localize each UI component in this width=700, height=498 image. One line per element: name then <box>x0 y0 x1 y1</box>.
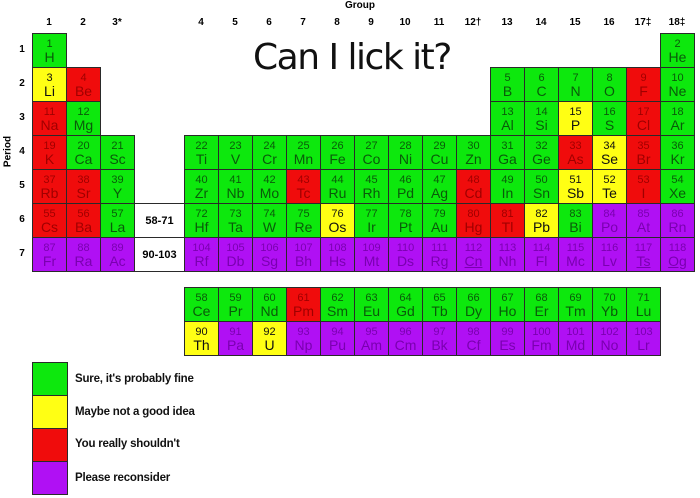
panel: main periodic table: Db <box>227 253 244 269</box>
period numbers: 4 <box>19 146 25 157</box>
panel: main periodic table: Rf <box>194 253 208 269</box>
panel: main periodic table: Se <box>601 151 618 167</box>
period numbers: 7 <box>19 248 25 259</box>
group axis label: Group <box>345 0 375 11</box>
panel: lanthanides and actinides: Sm <box>327 303 348 319</box>
panel: main periodic table: Br <box>636 151 650 167</box>
panel: main periodic table: 55 <box>43 208 56 220</box>
panel: main periodic table: 20 <box>77 140 90 152</box>
panel: main periodic table: 8 <box>606 72 613 84</box>
panel: main periodic table: Bh <box>295 253 312 269</box>
panel: main periodic table: 32 <box>535 140 548 152</box>
panel: main periodic table: 110 <box>397 242 414 254</box>
panel: main periodic table: 26 <box>331 140 344 152</box>
panel: main periodic table: Cs <box>41 219 58 235</box>
panel: lanthanides and actinides: Pr <box>228 303 242 319</box>
group numbers: 8 <box>334 17 340 28</box>
panel: main periodic table: Tl <box>502 219 513 235</box>
panel: main periodic table: B <box>503 83 512 99</box>
panel: lanthanides and actinides <box>184 287 661 356</box>
panel: main periodic table: Cr <box>262 151 277 167</box>
panel: lanthanides and actinides: 93 <box>297 326 310 338</box>
panel: lanthanides and actinides: No <box>601 337 618 353</box>
panel: main periodic table: Xe <box>669 185 686 201</box>
panel: lanthanides and actinides: Er <box>534 303 548 319</box>
panel: lanthanides and actinides: 103 <box>634 326 653 338</box>
panel: main periodic table: Ba <box>75 219 92 235</box>
panel: main periodic table: Li <box>44 83 55 99</box>
panel: main periodic table: Ni <box>399 151 412 167</box>
panel: main periodic table: Ds <box>397 253 414 269</box>
panel: main periodic table: 13 <box>501 106 514 118</box>
panel: lanthanides and actinides: Pa <box>227 337 244 353</box>
panel: main periodic table: 17 <box>637 106 650 118</box>
panel: main periodic table: 112 <box>465 242 482 254</box>
panel: main periodic table: 34 <box>603 140 616 152</box>
panel: lanthanides and actinides: U <box>264 337 275 353</box>
panel: main periodic table: Ra <box>75 253 92 269</box>
panel: main periodic table: Mt <box>364 253 379 269</box>
panel: main periodic table: W <box>263 219 276 235</box>
panel: main periodic table: 4 <box>80 72 87 84</box>
panel: main periodic table: S <box>605 117 614 133</box>
panel: lanthanides and actinides: Eu <box>363 303 380 319</box>
panel: main periodic table: 50 <box>535 174 548 186</box>
panel: lanthanides and actinides: 71 <box>637 292 650 304</box>
panel: main periodic table: 114 <box>533 242 550 254</box>
panel: lanthanides and actinides: 68 <box>535 292 548 304</box>
panel: main periodic table: Y <box>113 185 122 201</box>
panel: main periodic table: Lv <box>602 253 617 269</box>
panel: lanthanides and actinides: 67 <box>501 292 514 304</box>
panel: main periodic table: Tc <box>296 185 310 201</box>
panel: main periodic table: Bi <box>569 219 582 235</box>
legend: Sure, it's probably fine <box>75 373 194 385</box>
panel: main periodic table: 74 <box>263 208 276 220</box>
panel: main periodic table: 106 <box>260 242 279 254</box>
group numbers: 11 <box>434 17 444 28</box>
panel: main periodic table: 44 <box>331 174 344 186</box>
panel: lanthanides and actinides: Bk <box>431 337 448 353</box>
panel: lanthanides and actinides: 60 <box>263 292 276 304</box>
panel: main periodic table: 40 <box>195 174 208 186</box>
panel: main periodic table: Ge <box>532 151 551 167</box>
period numbers: 1 <box>19 44 25 55</box>
panel: lanthanides and actinides: 61 <box>297 292 310 304</box>
panel: main periodic table: Ar <box>670 117 684 133</box>
panel: main periodic table: Pd <box>397 185 414 201</box>
panel: lanthanides and actinides: Ho <box>499 303 516 319</box>
panel: main periodic table: Pt <box>399 219 412 235</box>
panel: lanthanides and actinides: Cf <box>466 337 480 353</box>
group numbers: 5 <box>232 17 238 28</box>
panel: lanthanides and actinides: Cm <box>395 337 416 353</box>
panel: main periodic table: Ga <box>498 151 517 167</box>
group numbers: 10 <box>399 17 411 28</box>
panel: main periodic table: 30 <box>467 140 480 152</box>
group numbers <box>46 17 685 28</box>
panel: main periodic table: O <box>604 83 615 99</box>
panel: main periodic table: Sn <box>533 185 550 201</box>
panel: main periodic table: 49 <box>501 174 514 186</box>
panel: lanthanides and actinides: Dy <box>465 303 482 319</box>
panel: main periodic table: Ts <box>636 253 650 269</box>
panel: lanthanides and actinides: Lr <box>637 337 650 353</box>
panel: main periodic table: 104 <box>192 242 211 254</box>
period numbers: 6 <box>19 214 25 225</box>
panel: main periodic table: 86 <box>671 208 684 220</box>
panel: main periodic table: At <box>637 219 650 235</box>
group numbers: 13 <box>501 17 513 28</box>
panel: main periodic table: Cl <box>637 117 650 133</box>
panel: lanthanides and actinides: 64 <box>399 292 412 304</box>
panel: lanthanides and actinides: 100 <box>532 326 551 338</box>
panel: main periodic table: 115 <box>567 242 584 254</box>
group numbers: 15 <box>569 17 581 28</box>
panel: main periodic table: Ne <box>669 83 686 99</box>
panel: main periodic table: 108 <box>328 242 347 254</box>
panel: main periodic table: He <box>669 49 686 65</box>
panel: main periodic table: Be <box>75 83 92 99</box>
panel: main periodic table: 22 <box>195 140 208 152</box>
panel: main periodic table: 12 <box>77 106 90 118</box>
panel: lanthanides and actinides: Ce <box>193 303 210 319</box>
panel: main periodic table: 27 <box>365 140 378 152</box>
group numbers: 9 <box>368 17 374 28</box>
panel: main periodic table: 116 <box>601 242 618 254</box>
panel: lanthanides and actinides: 99 <box>501 326 514 338</box>
panel: main periodic table: 76 <box>331 208 344 220</box>
panel: main periodic table: 15 <box>569 106 582 118</box>
panel: main periodic table: Sg <box>261 253 278 269</box>
panel: main periodic table: Rn <box>669 219 686 235</box>
panel: main periodic table: 1 <box>46 38 53 50</box>
panel: main periodic table: 82 <box>535 208 548 220</box>
panel: lanthanides and actinides: Es <box>499 337 516 353</box>
panel: main periodic table: 83 <box>569 208 582 220</box>
panel: main periodic table: Og <box>668 253 687 269</box>
panel: main periodic table: Ru <box>329 185 346 201</box>
panel: main periodic table: Mg <box>74 117 93 133</box>
panel: main periodic table: Ta <box>228 219 243 235</box>
panel: main periodic table: Al <box>501 117 514 133</box>
group numbers: 3* <box>112 17 122 28</box>
panel: main periodic table: 23 <box>229 140 242 152</box>
panel: lanthanides and actinides: Tb <box>431 303 448 319</box>
group numbers: 17‡ <box>635 17 651 28</box>
panel: main periodic table: 78 <box>399 208 412 220</box>
legend <box>32 362 195 495</box>
panel: main periodic table: 58-71 <box>145 215 174 227</box>
panel: lanthanides and actinides: 69 <box>569 292 582 304</box>
panel: main periodic table: Cn <box>465 253 482 269</box>
panel: main periodic table: 25 <box>297 140 310 152</box>
legend: Maybe not a good idea <box>75 406 195 418</box>
panel: main periodic table: Re <box>295 219 312 235</box>
panel: main periodic table: 87 <box>43 242 56 254</box>
panel: main periodic table: Ir <box>367 219 376 235</box>
panel: main periodic table: Sr <box>76 185 90 201</box>
panel: main periodic table: I <box>642 185 645 201</box>
panel: lanthanides and actinides: Tm <box>565 303 586 319</box>
panel: main periodic table: 75 <box>297 208 310 220</box>
panel: lanthanides and actinides: 59 <box>229 292 242 304</box>
panel: main periodic table: 89 <box>111 242 124 254</box>
panel: main periodic table: Po <box>601 219 618 235</box>
panel: main periodic table: 52 <box>603 174 616 186</box>
panel: main periodic table: 7 <box>572 72 579 84</box>
panel: main periodic table: Hg <box>465 219 482 235</box>
panel: main periodic table: In <box>502 185 513 201</box>
panel: main periodic table: Sb <box>567 185 584 201</box>
panel: main periodic table: Sc <box>109 151 126 167</box>
panel: main periodic table: 37 <box>43 174 56 186</box>
panel: main periodic table: Fl <box>536 253 547 269</box>
panel: main periodic table: 111 <box>431 242 448 254</box>
panel: main periodic table: 33 <box>569 140 582 152</box>
panel: main periodic table: Si <box>535 117 548 133</box>
panel: main periodic table: Zn <box>465 151 482 167</box>
panel: main periodic table: 42 <box>263 174 276 186</box>
panel: main periodic table: 16 <box>603 106 616 118</box>
panel: main periodic table: Ca <box>75 151 92 167</box>
panel: main periodic table: 46 <box>399 174 412 186</box>
panel: lanthanides and actinides: 65 <box>433 292 446 304</box>
panel: main periodic table: Fr <box>43 253 56 269</box>
panel: main periodic table: Rh <box>363 185 380 201</box>
panel: main periodic table: 43 <box>297 174 310 186</box>
panel: main periodic table: 51 <box>569 174 582 186</box>
group numbers: 16 <box>603 17 615 28</box>
panel: main periodic table: Mn <box>294 151 313 167</box>
panel: main periodic table: 113 <box>499 242 516 254</box>
panel: main periodic table: 105 <box>226 242 245 254</box>
panel: main periodic table: 11 <box>44 106 55 118</box>
panel: main periodic table: 2 <box>674 38 681 50</box>
panel: main periodic table: 88 <box>77 242 90 254</box>
panel: main periodic table: Co <box>363 151 380 167</box>
panel: lanthanides and actinides: Pu <box>329 337 346 353</box>
panel: main periodic table: Mo <box>260 185 279 201</box>
panel: main periodic table: 31 <box>501 140 514 152</box>
period numbers <box>19 44 25 259</box>
panel: lanthanides and actinides: 58 <box>195 292 208 304</box>
panel: main periodic table: C <box>536 83 547 99</box>
panel: main periodic table: 72 <box>195 208 208 220</box>
panel: main periodic table: Rg <box>431 253 448 269</box>
panel: main periodic table: Au <box>431 219 448 235</box>
panel: main periodic table: P <box>571 117 580 133</box>
group numbers: 12† <box>465 17 481 28</box>
panel: main periodic table: 5 <box>504 72 511 84</box>
panel: lanthanides and actinides: 98 <box>467 326 480 338</box>
panel: main periodic table: 29 <box>433 140 446 152</box>
panel: main periodic table: 90-103 <box>142 249 177 261</box>
panel: main periodic table: La <box>110 219 125 235</box>
panel: lanthanides and actinides: 70 <box>603 292 616 304</box>
panel: lanthanides and actinides: Fm <box>531 337 552 353</box>
group numbers: 6 <box>266 17 272 28</box>
panel: main periodic table: 3 <box>46 72 53 84</box>
panel: main periodic table: Te <box>602 185 617 201</box>
panel: main periodic table: N <box>570 83 581 99</box>
panel: main periodic table: Nh <box>499 253 516 269</box>
panel: main periodic table: 41 <box>229 174 242 186</box>
panel: lanthanides and actinides: 92 <box>263 326 276 338</box>
panel: main periodic table: 47 <box>433 174 446 186</box>
legend: You really shouldn't <box>75 438 180 450</box>
panel: main periodic table: 19 <box>43 140 56 152</box>
panel: main periodic table: 79 <box>433 208 446 220</box>
panel: main periodic table: 109 <box>362 242 381 254</box>
panel: main periodic table: Ti <box>196 151 207 167</box>
panel: main periodic table: 73 <box>229 208 242 220</box>
panel: main periodic table: 57 <box>111 208 124 220</box>
panel: lanthanides and actinides: 63 <box>365 292 378 304</box>
panel: main periodic table: 14 <box>535 106 548 118</box>
panel: main periodic table: 24 <box>263 140 276 152</box>
panel: main periodic table: Fe <box>329 151 346 167</box>
panel: main periodic table: Nb <box>227 185 244 201</box>
panel: main periodic table: 45 <box>365 174 378 186</box>
group numbers: 18‡ <box>669 17 685 28</box>
panel: main periodic table: 107 <box>294 242 313 254</box>
panel: lanthanides and actinides: 101 <box>566 326 585 338</box>
period numbers: 2 <box>19 78 25 89</box>
panel: main periodic table: As <box>567 151 584 167</box>
panel: main periodic table: 118 <box>669 242 686 254</box>
panel: main periodic table: 39 <box>111 174 124 186</box>
group numbers: 4 <box>198 17 204 28</box>
panel: main periodic table: Pb <box>533 219 550 235</box>
panel: main periodic table: 77 <box>365 208 378 220</box>
panel: main periodic table: Rb <box>41 185 58 201</box>
panel: lanthanides and actinides: Yb <box>601 303 618 319</box>
panel: lanthanides and actinides: Lu <box>636 303 651 319</box>
panel: main periodic table: 21 <box>111 140 124 152</box>
period axis label: Period <box>2 136 14 167</box>
panel: main periodic table: Cu <box>431 151 448 167</box>
panel: main periodic table: 80 <box>467 208 480 220</box>
panel: lanthanides and actinides: 90 <box>195 326 208 338</box>
panel: main periodic table: Na <box>41 117 58 133</box>
panel: main periodic table: Zr <box>195 185 208 201</box>
panel: main periodic table: Cd <box>465 185 482 201</box>
panel: main periodic table: 84 <box>603 208 616 220</box>
panel: main periodic table: 117 <box>635 242 652 254</box>
panel: lanthanides and actinides: Np <box>295 337 312 353</box>
group numbers: 7 <box>300 17 306 28</box>
period numbers: 5 <box>19 180 25 191</box>
panel: lanthanides and actinides: 66 <box>467 292 480 304</box>
panel: main periodic table: H <box>44 49 55 65</box>
panel: lanthanides and actinides: 62 <box>331 292 344 304</box>
panel: lanthanides and actinides: Nd <box>261 303 278 319</box>
panel: lanthanides and actinides: 91 <box>229 326 242 338</box>
panel: lanthanides and actinides: 95 <box>365 326 378 338</box>
panel: main periodic table: 18 <box>671 106 684 118</box>
panel: main periodic table: V <box>231 151 240 167</box>
panel: main periodic table: Os <box>329 219 346 235</box>
panel: main periodic table: 56 <box>77 208 90 220</box>
panel: main periodic table: Hs <box>329 253 346 269</box>
panel: main periodic table: 28 <box>399 140 412 152</box>
group numbers: 1 <box>46 17 52 28</box>
panel: main periodic table: Kr <box>670 151 684 167</box>
panel: main periodic table: F <box>639 83 648 99</box>
panel: main periodic table: Mc <box>566 253 585 269</box>
title: Can I lick it? <box>253 37 451 78</box>
panel: main periodic table: 48 <box>467 174 480 186</box>
panel: main periodic table: 85 <box>637 208 650 220</box>
panel: main periodic table: 36 <box>671 140 684 152</box>
panel: main periodic table: 35 <box>637 140 650 152</box>
panel: lanthanides and actinides: Am <box>361 337 382 353</box>
legend: Please reconsider <box>75 472 170 484</box>
panel: main periodic table: K <box>45 151 54 167</box>
group numbers: 2 <box>80 17 86 28</box>
panel: main periodic table: 81 <box>501 208 514 220</box>
panel: main periodic table: 9 <box>640 72 647 84</box>
panel: main periodic table: 10 <box>671 72 684 84</box>
panel: main periodic table: 54 <box>671 174 684 186</box>
panel: main periodic table: Hf <box>194 219 208 235</box>
group numbers: 14 <box>535 17 547 28</box>
panel: main periodic table: 38 <box>77 174 90 186</box>
panel: main periodic table: 53 <box>637 174 650 186</box>
panel: main periodic table: Ag <box>431 185 448 201</box>
panel: lanthanides and actinides: 96 <box>399 326 412 338</box>
panel: main periodic table: Ac <box>109 253 126 269</box>
panel: main periodic table: 6 <box>538 72 545 84</box>
panel: lanthanides and actinides: 102 <box>600 326 619 338</box>
panel: lanthanides and actinides: Th <box>193 337 210 353</box>
panel: main periodic table <box>32 33 695 272</box>
panel: lanthanides and actinides: Pm <box>293 303 314 319</box>
period numbers: 3 <box>19 112 25 123</box>
panel: lanthanides and actinides: Md <box>566 337 585 353</box>
panel: lanthanides and actinides: Gd <box>396 303 415 319</box>
panel: lanthanides and actinides: 97 <box>433 326 446 338</box>
panel: lanthanides and actinides: 94 <box>331 326 344 338</box>
